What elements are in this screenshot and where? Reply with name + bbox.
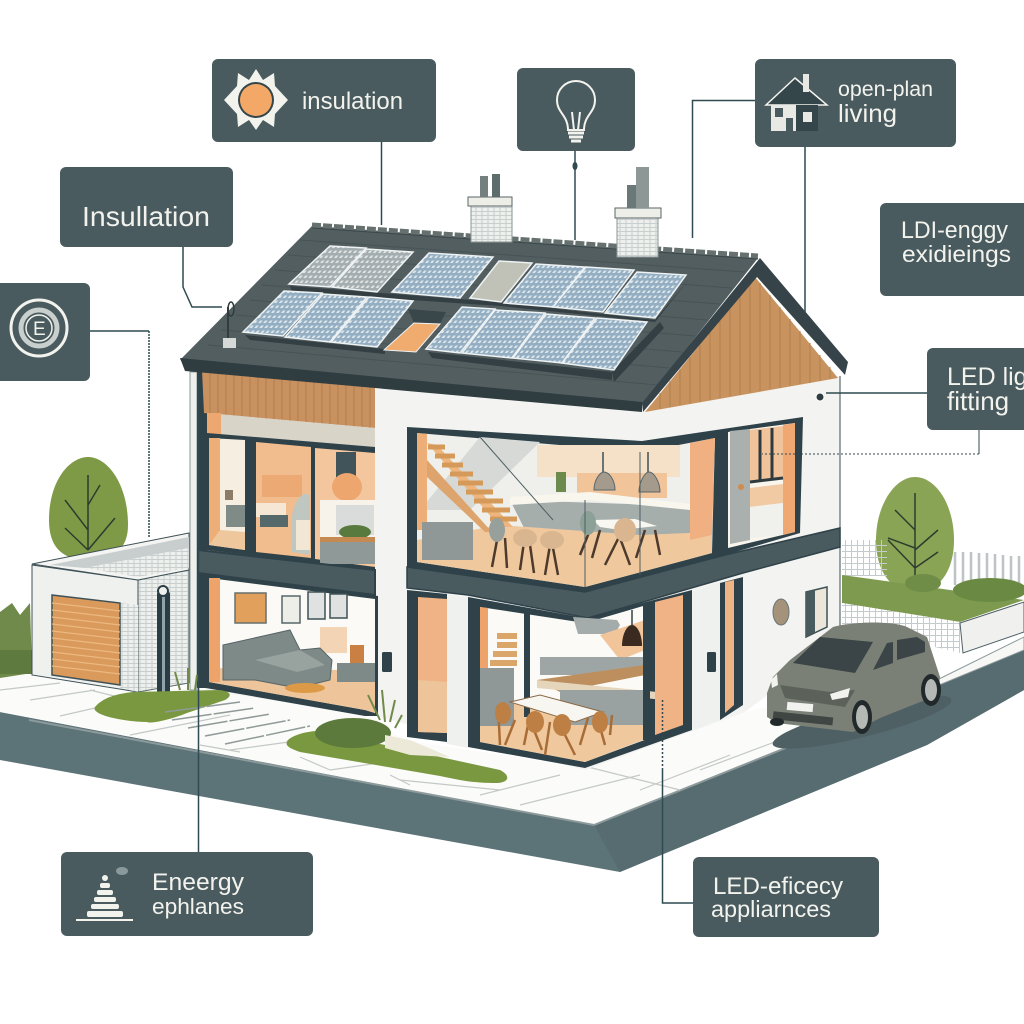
lawn: left: [95, 690, 230, 723]
callout: top insulation: [212, 59, 436, 225]
callout: LDI-energy exidieings: exidieings: [902, 241, 1011, 267]
pane: left bedroom: [209, 438, 245, 550]
side window: [806, 587, 827, 637]
roof antenna fitting: [223, 302, 236, 348]
callout: LED-efficiency appliances: [662, 700, 879, 937]
chimney right: [615, 167, 661, 257]
floor band centre: [407, 528, 840, 618]
callout: energy appliances: ephlanes: [152, 894, 244, 919]
timber cladding left: [202, 370, 375, 428]
icon: stacked pyramid: [76, 867, 133, 921]
ground plinth: [0, 650, 1024, 872]
glass lines: [480, 437, 640, 587]
pendant lamp: [622, 610, 642, 646]
icon: bulb: [557, 81, 595, 141]
callout: LED-efficiency appliances: LED-eficecy: [713, 873, 843, 900]
parked car: [767, 622, 955, 759]
wall switch left: [382, 652, 392, 672]
callout: insullation: Insullation: [82, 201, 210, 232]
callout: energy appliances: [61, 380, 313, 936]
upper centre open-plan window: [407, 417, 803, 592]
living room window: [200, 574, 378, 716]
garden shrubs left: [0, 603, 32, 678]
lower right door: [720, 577, 743, 720]
lower row panels: [243, 291, 647, 370]
house walls: [190, 370, 840, 770]
callout: energy icon: [0, 283, 149, 538]
icon: circular E: [11, 300, 67, 356]
lawn: front: [286, 731, 507, 783]
pillars between openings: [447, 583, 720, 748]
pavement strip right: [813, 637, 1024, 737]
right garden with fence and planter: [842, 540, 1024, 653]
solar panels: [243, 246, 690, 382]
pendants: [594, 452, 660, 492]
callout: LDI-energy exidieings: LDI-enggy: [901, 217, 1008, 244]
bollard lamp: [157, 586, 170, 709]
stairs lower: [480, 612, 530, 726]
upper right window: [728, 423, 795, 548]
lower centre kitchen diner window: [468, 590, 692, 768]
round wall vent: [773, 599, 789, 625]
right orange panel: [690, 438, 715, 540]
callout: open-plan living: living: [838, 100, 897, 128]
callout: top insulation: insulation: [302, 88, 403, 115]
dining table and chairs: [489, 511, 660, 575]
foreground lawns: [95, 668, 507, 783]
tree left: [49, 457, 128, 560]
chimney left: [468, 174, 512, 242]
floor: [417, 525, 712, 587]
timber gable right: [645, 277, 838, 412]
callout: LDI-energy exidieings: [880, 203, 1024, 296]
paved forecourt: [0, 672, 813, 825]
wall pictures: [235, 592, 347, 653]
dining table and chairs: [495, 695, 612, 755]
floor band left: [198, 550, 375, 595]
low cabinet: [422, 522, 473, 560]
callout: open-plan living: [692, 59, 956, 312]
callout: light bulb: [517, 68, 635, 240]
upper cabinets and splashback: [537, 445, 680, 498]
sofa: [223, 630, 375, 693]
pane: right room: [315, 448, 375, 567]
kitchen counter and island: [537, 657, 667, 725]
garage: [32, 533, 189, 692]
path steps: [165, 702, 310, 744]
callout: LED light fitting: [762, 348, 1024, 454]
callout: energy icon: E: [33, 319, 46, 340]
wall switch right: [707, 652, 716, 672]
skylight: [384, 309, 446, 352]
pane: centre room: [256, 442, 311, 558]
callout: energy appliances: Eneergy: [152, 869, 244, 896]
tree right: [876, 477, 954, 614]
callout: LED-efficiency appliances: appliarnces: [711, 896, 831, 922]
upper left rooms: [207, 413, 375, 570]
icon: sun: [224, 69, 288, 130]
lower left door: [407, 590, 447, 742]
icon: small house: [766, 74, 827, 131]
callout: insullation: [60, 167, 233, 307]
kitchen counter: [510, 492, 690, 538]
callout: LED light fitting: fitting: [947, 386, 1009, 416]
staircase: [427, 443, 517, 532]
upper cabinets: [573, 617, 620, 634]
callout: open-plan living: open-plan: [838, 78, 933, 101]
roof: [180, 225, 848, 412]
top row panels: [289, 246, 686, 318]
